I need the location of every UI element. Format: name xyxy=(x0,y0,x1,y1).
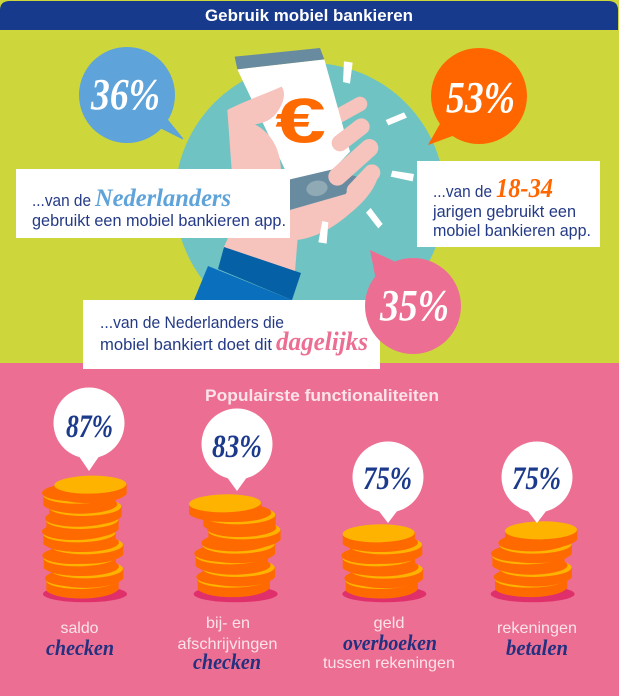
label: bij- en afschrijvingen checken: checken xyxy=(193,649,261,674)
label: saldo checken xyxy=(46,620,114,660)
label: rekeningen betalen: rekeningen xyxy=(497,620,577,637)
text box: dagelijks: mobiel bankiert doet dit xyxy=(100,336,272,354)
phone body xyxy=(237,59,350,180)
header bar xyxy=(0,1,618,30)
text box: 18-34 xyxy=(417,161,600,247)
bubble: 75% right xyxy=(502,442,572,523)
coin stack 2 xyxy=(189,494,281,602)
bubble: 75% left: 75% xyxy=(363,461,412,497)
bubble: 83% xyxy=(202,408,272,491)
label: geld overboeken tussen rekeningen: overboeken xyxy=(343,630,437,655)
thumb and palm xyxy=(227,87,284,170)
label: rekeningen betalen: betalen xyxy=(506,635,568,660)
label: rekeningen betalen xyxy=(497,620,577,660)
text box: Nederlanders: gebruikt een mobiel bankieren app. xyxy=(32,212,286,230)
forearm xyxy=(223,230,298,272)
label: bij- en afschrijvingen checken: bij- en xyxy=(206,615,250,632)
coin stack 1 xyxy=(42,475,127,602)
euro sign: € xyxy=(275,87,326,157)
text box: Nederlanders xyxy=(16,169,290,238)
speech bubble: 36%: 36% xyxy=(90,70,160,119)
coin stack 3 xyxy=(341,524,426,602)
text box: dagelijks: ...van de Nederlanders die xyxy=(100,314,284,332)
bubble: 75% left xyxy=(352,442,424,523)
bubble: 87% xyxy=(54,388,124,471)
rays xyxy=(318,61,414,244)
text box: dagelijks: dagelijks xyxy=(276,327,368,356)
label: geld overboeken tussen rekeningen: geld xyxy=(374,615,404,632)
panel: lime background xyxy=(0,0,619,364)
text box: Nederlanders: Nederlanders xyxy=(94,185,231,212)
text box: 18-34: jarigen gebruikt een xyxy=(432,203,576,221)
speech bubble: 36% xyxy=(79,47,183,143)
label: saldo checken: checken xyxy=(46,635,114,660)
speech bubble: 35% xyxy=(365,250,461,354)
teal circle xyxy=(175,63,445,333)
speech bubble: 53% xyxy=(428,48,527,145)
bubble: 87%: 87% xyxy=(66,409,113,445)
label: geld overboeken tussen rekeningen: tussen rekeningen xyxy=(323,655,455,672)
back finger xyxy=(338,104,360,116)
illustration: hand holding phone xyxy=(223,48,414,272)
speech bubble: 53%: 53% xyxy=(446,73,515,122)
label: bij- en afschrijvingen checken: afschrijvingen xyxy=(178,636,278,653)
label: geld overboeken tussen rekeningen xyxy=(323,615,455,672)
label: saldo checken: saldo xyxy=(60,620,99,637)
title: Gebruik mobiel bankieren xyxy=(205,6,413,25)
text box: dagelijks xyxy=(83,300,380,369)
text box: 18-34: 18-34 xyxy=(496,173,553,203)
bubble: 83%: 83% xyxy=(212,429,262,465)
phone bottom bar xyxy=(290,169,357,210)
coin stack 4 xyxy=(491,521,577,602)
panel: pink background xyxy=(0,363,619,696)
label: bij- en afschrijvingen checken xyxy=(178,615,278,674)
text box: 18-34: ...van de xyxy=(433,183,492,201)
text box: 18-34: mobiel bankieren app. xyxy=(433,222,591,240)
sleeve xyxy=(194,247,301,300)
phone top bar xyxy=(235,48,324,69)
bubble: 75% right: 75% xyxy=(512,461,561,497)
heading: Populairste functionaliteiten: Populairste functionaliteiten xyxy=(205,386,439,405)
speech bubble: 35%: 35% xyxy=(379,281,449,330)
phone button xyxy=(305,179,329,198)
fingers xyxy=(337,127,372,191)
lower palm xyxy=(290,170,380,240)
text box: Nederlanders: ...van de xyxy=(32,192,91,210)
